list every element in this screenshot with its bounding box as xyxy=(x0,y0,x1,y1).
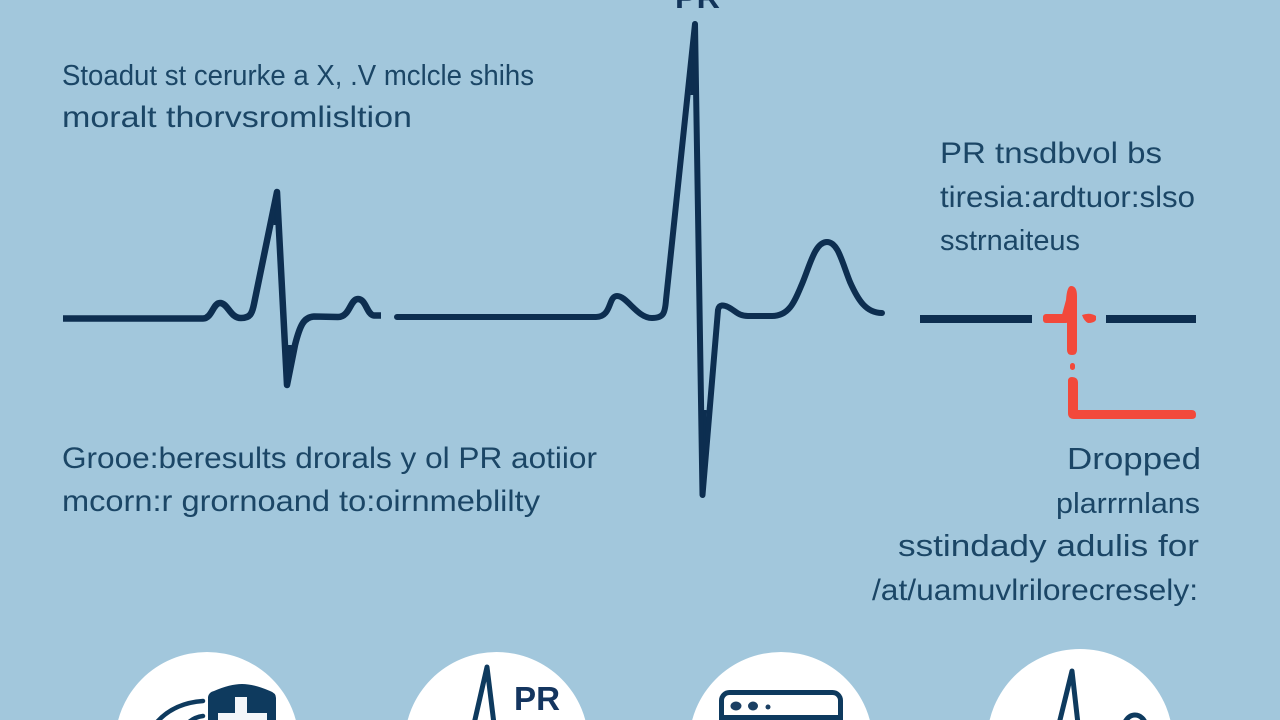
text block: right middle xyxy=(940,137,1195,257)
text block: top left: Stoadut st cerurke a X, .V mclcle shihs xyxy=(62,60,534,92)
text block: top left: moralt thorvsromlisltion xyxy=(62,101,412,134)
text block: lower left: Grooe:beresults drorals y ol PR aotiior xyxy=(62,442,597,475)
text block: right middle: tiresia:ardtuor:slso xyxy=(940,181,1195,214)
text block: lower left xyxy=(62,442,597,518)
text block: lower left: mcorn:r grornoand to:oirnmeblilty xyxy=(62,485,540,518)
chart: red PR interval marker xyxy=(1043,286,1196,419)
chart: interrupted baseline xyxy=(920,315,1196,323)
text block: lower right: sstindady adulis for xyxy=(898,528,1199,563)
icon: shield with arcs xyxy=(115,652,299,720)
text block: lower right: /at/uamuvlrilorecresely: xyxy=(872,574,1198,607)
text block: lower right: Dropped xyxy=(1067,441,1201,476)
icon: PR waveform xyxy=(404,652,588,720)
text block: top left xyxy=(62,60,534,134)
text block: right middle: sstrnaiteus xyxy=(940,225,1080,257)
chart: large ECG trace xyxy=(397,24,882,495)
text block: right middle: PR tnsdbvol bs xyxy=(940,137,1162,170)
text block: lower right: plarrrnlans xyxy=(1056,488,1200,520)
icon: PR waveform: PR xyxy=(514,680,560,717)
text block: lower right xyxy=(872,441,1201,607)
icon: browser window xyxy=(689,652,873,720)
chart: small ECG trace xyxy=(63,192,381,385)
icon: ECG waveform xyxy=(987,649,1173,720)
